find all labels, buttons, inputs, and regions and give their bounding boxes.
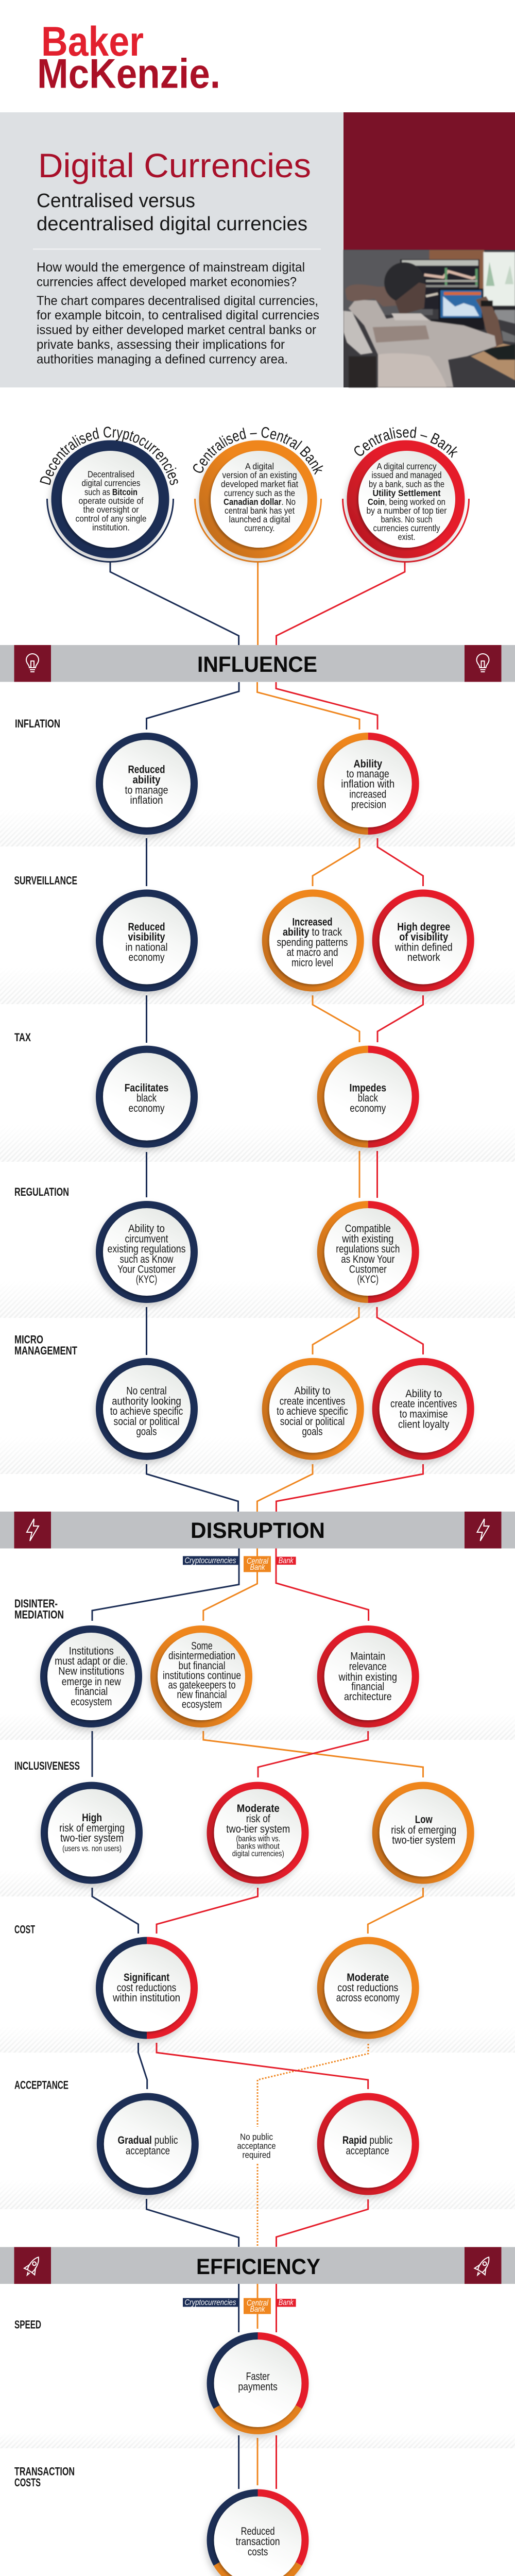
legend: currency types (efficiency): [183, 2298, 296, 2314]
panel: dark red block: [344, 112, 515, 250]
circle: institutions must adapt or die: New institutions: [58, 1665, 124, 1677]
circle: no central authority: authority looking: [112, 1395, 181, 1407]
row label: transaction costs: COSTS: [14, 2476, 41, 2489]
circle: ability to create incentives for loyalty: client loyalty: [398, 1419, 450, 1430]
subtitle: decentralised digital currencies: [37, 213, 307, 235]
subtitle: [37, 190, 307, 235]
icon: rocket left: [22, 2254, 44, 2278]
circle: low risk of two-tier system: risk of emerging: [391, 1824, 456, 1836]
circle: reduced ability to manage inflation: inflation: [130, 794, 163, 806]
top circle: centralised bank: A digital currency: [377, 461, 437, 471]
top circle: centralised central bank: version of an existing: [222, 470, 297, 480]
circle: facilitates black economy: black: [136, 1092, 157, 1104]
logo: Baker McKenzie: Baker: [41, 19, 144, 65]
circle: some disintermediation: as gatekeepers to: [168, 1679, 236, 1691]
row label: micro management: [14, 1333, 77, 1357]
intro text: The chart compares decentralised digital currencies,: [37, 294, 318, 308]
row label: inclusiveness: INCLUSIVENESS: [14, 1759, 80, 1772]
circle: moderate risk of two-tier system: Moderate: [237, 1803, 280, 1815]
top circle: centralised bank: by a number of top tier: [367, 505, 447, 516]
circle: faster payments: [207, 2332, 308, 2434]
legend: currency types (efficiency): Bank: [279, 2298, 294, 2307]
circle: significant cost reductions: [96, 1937, 198, 2039]
top circle: decentralised cryptocurrencies: Decentralised: [88, 469, 134, 479]
circle: ability to create incentives for loyalty: create incentives: [390, 1398, 457, 1410]
circle: ability to circumvent regulations: circumvent: [125, 1233, 168, 1245]
circle: impedes black economy: black: [358, 1092, 378, 1104]
circle: some disintermediation: but financial: [178, 1660, 226, 1672]
circle: faster payments: payments: [238, 2381, 278, 2393]
circle: institutions must adapt or die: must adapt or die.: [55, 1655, 128, 1667]
circle: significant cost reductions: cost reductions: [117, 1982, 176, 1994]
legend: currency types (disruption): Bank: [250, 1563, 265, 1572]
circle: moderate cost reductions: Moderate: [347, 1972, 389, 1984]
circle: compatible with existing regulations: as Know Your: [341, 1253, 394, 1265]
circle: reduced visibility: visibility: [128, 931, 165, 943]
circle: high risk of two-tier system: (users vs. non users): [62, 1844, 122, 1853]
circle: ability to circumvent regulations: existing regulations: [107, 1243, 185, 1255]
intro text: [37, 260, 319, 367]
arrows: connector lines, navy: [92, 562, 239, 2576]
circle: facilitates black economy: economy: [129, 1103, 165, 1114]
circle: significant cost reductions: Significant: [124, 1972, 169, 1984]
text: no public acceptance required: required: [242, 2149, 271, 2160]
circle: ability to create incentives for loyalty: to maximise: [400, 1409, 448, 1420]
circle: ability to create incentives for goals: goals: [302, 1426, 322, 1438]
circle: facilitates black economy: [96, 1046, 198, 1148]
row label: micro management: MICRO: [14, 1333, 43, 1346]
circle: moderate cost reductions: [317, 1937, 419, 2039]
top circle: decentralised cryptocurrencies: control of any single: [75, 513, 146, 523]
heading band: influence: INFLUENCE: [197, 652, 317, 677]
circle: low risk of two-tier system: two-tier system: [392, 1834, 455, 1846]
circle: high risk of two-tier system: risk of emerging: [59, 1822, 125, 1834]
top circle: centralised bank: exist.: [398, 532, 415, 542]
circle: maintain relevance: within existing: [338, 1671, 397, 1683]
circle: reduced ability to manage inflation: Reduced: [128, 764, 165, 776]
top circle: centralised central bank: central bank has yet: [225, 505, 295, 516]
row label: transaction costs: [14, 2465, 75, 2489]
arrows: connector lines, red: [156, 562, 423, 2576]
circle: no central authority: to achieve specific: [110, 1405, 183, 1417]
row label: micro management: MANAGEMENT: [14, 1344, 77, 1357]
circle: reduced transaction costs: transaction: [236, 2536, 280, 2548]
circle: high degree of visibility: within defined: [394, 942, 453, 954]
circle: reduced transaction costs: [207, 2489, 308, 2576]
row label: inflation: INFLATION: [15, 717, 60, 730]
circle: increased ability to track: Increased: [293, 916, 333, 928]
row label: transaction costs: TRANSACTION: [14, 2465, 75, 2478]
circle: maintain relevance: relevance: [349, 1660, 387, 1672]
panel: intro: [0, 112, 344, 387]
circle: reduced transaction costs: costs: [248, 2546, 268, 2558]
circle: some disintermediation: new financial: [177, 1689, 227, 1701]
icon: light bulb left: [26, 654, 39, 672]
circle: ability to manage inflation: increased: [349, 788, 386, 801]
circle: ability to manage inflation: precision: [351, 799, 386, 810]
legend: currency types (efficiency): Bank: [250, 2305, 265, 2314]
row label: disintermediation: DISINTER-: [14, 1597, 58, 1610]
circle: institutions must adapt or die: financial: [75, 1686, 108, 1698]
circle: high risk of two-tier system: High: [82, 1812, 102, 1824]
circle: no central authority: [96, 1358, 198, 1460]
intro text: issued by either developed market central banks or: [37, 323, 316, 337]
circle: impedes black economy: economy: [350, 1103, 386, 1114]
circle: high risk of two-tier system: two-tier system: [60, 1833, 124, 1844]
intro text: private banks, assessing their implications for: [37, 337, 285, 352]
heading band: efficiency: EFFICIENCY: [196, 2255, 320, 2279]
circle: ability to manage inflation: [317, 733, 419, 835]
circle: reduced visibility: Reduced: [128, 921, 165, 933]
row label: regulation: REGULATION: [14, 1185, 69, 1198]
circle: some disintermediation: ecosystem: [182, 1699, 222, 1710]
top circle: decentralised cryptocurrencies: the oversight or: [83, 504, 139, 515]
circle: some disintermediation: Some: [191, 1640, 213, 1652]
circle: maintain relevance: architecture: [344, 1691, 392, 1703]
circle: maintain relevance: financial: [351, 1681, 384, 1693]
title: Digital Currencies: [38, 146, 311, 184]
top circle: centralised bank: currencies currently: [373, 523, 440, 533]
circle: compatible with existing regulations: Customer: [349, 1263, 387, 1276]
circle: ability to circumvent regulations: such as Know: [119, 1253, 174, 1265]
circle: increased ability to track: spending patterns: [277, 937, 348, 948]
circle: moderate risk of two-tier system: [207, 1782, 309, 1884]
circle: maintain relevance: [317, 1625, 419, 1727]
circle: increased ability to track: ability to track: [283, 926, 342, 938]
circle: high risk of two-tier system: [41, 1782, 143, 1884]
icon: lightning bolt left: [27, 1519, 39, 1541]
circle: reduced ability to manage inflation: to manage: [125, 784, 168, 796]
row label: cost: COST: [14, 1923, 35, 1936]
photo: trader at monitors: [344, 250, 515, 387]
circle: high degree of visibility: network: [407, 952, 440, 963]
heading band: influence: [0, 645, 515, 682]
top circle: centralised bank: Centralised – Bank: [354, 427, 458, 458]
text: no public acceptance required: No public: [240, 2132, 273, 2142]
legend: currency types (efficiency): Cryptocurrencies: [184, 2298, 236, 2307]
circle: ability to circumvent regulations: [96, 1201, 198, 1303]
circle: ability to manage inflation: inflation with: [341, 778, 394, 790]
row label: speed: SPEED: [14, 2318, 41, 2331]
circle: low risk of two-tier system: [372, 1782, 474, 1884]
circle: gradual public acceptance: [97, 2093, 199, 2195]
circle: compatible with existing regulations: (KYC): [357, 1274, 379, 1285]
circle: ability to circumvent regulations: Ability to: [128, 1223, 165, 1234]
circle: moderate risk of two-tier system: risk of: [246, 1813, 270, 1825]
circle: compatible with existing regulations: regulations such: [336, 1243, 400, 1255]
circle: reduced visibility: economy: [129, 952, 165, 963]
circle: ability to circumvent regulations: (KYC): [136, 1274, 157, 1285]
top circle: centralised central bank: currency.: [244, 523, 275, 533]
circle: high degree of visibility: [372, 889, 474, 991]
circle: facilitates black economy: Facilitates: [125, 1082, 168, 1094]
circle: reduced transaction costs: Reduced: [241, 2526, 275, 2537]
circle: ability to create incentives for goals: [262, 1358, 364, 1460]
circle: impedes black economy: Impedes: [350, 1082, 386, 1094]
circle: ability to manage inflation: Ability: [354, 758, 382, 770]
top circle: decentralised cryptocurrencies: institution.: [92, 522, 130, 533]
row label: disintermediation: MEDIATION: [14, 1608, 64, 1621]
circle: moderate risk of two-tier system: (banks with vs.: [236, 1835, 280, 1843]
row label: tax: TAX: [14, 1031, 31, 1044]
logo: Baker McKenzie: [37, 19, 220, 97]
circle: compatible with existing regulations: with existing: [341, 1233, 393, 1245]
circle: ability to create incentives for goals: create incentives: [280, 1395, 345, 1407]
legend: currency types (disruption): Bank: [279, 1556, 294, 1565]
circle: ability to create incentives for goals: Ability to: [295, 1385, 331, 1397]
circle: institutions must adapt or die: emerge in new: [62, 1676, 121, 1688]
circle: institutions must adapt or die: Institutions: [69, 1646, 114, 1657]
circle: ability to create incentives for goals: to achieve specific: [277, 1405, 348, 1417]
circle: moderate risk of two-tier system: digital currencies): [232, 1850, 284, 1858]
circle: increased ability to track: [262, 889, 364, 991]
circle: ability to circumvent regulations: Your Customer: [117, 1263, 176, 1276]
circle: institutions must adapt or die: ecosystem: [71, 1696, 112, 1708]
top circle: centralised bank: [342, 427, 470, 565]
circle: reduced visibility: [96, 889, 198, 991]
circle: moderate cost reductions: cost reductions: [337, 1982, 398, 1994]
row label: surveillance: SURVEILLANCE: [14, 874, 77, 887]
row label: disintermediation: [14, 1597, 64, 1621]
circle: significant cost reductions: within institution: [112, 1992, 180, 2004]
top circle: centralised central bank: [193, 427, 323, 565]
legend: currency types (disruption): [183, 1556, 296, 1572]
top circle: centralised central bank: currency such as the: [224, 488, 295, 498]
circle: increased ability to track: at macro and: [286, 947, 338, 959]
circle: ability to create incentives for goals: social or political: [280, 1416, 345, 1428]
top circle: decentralised cryptocurrencies: digital currencies: [81, 478, 141, 488]
circle: rapid public acceptance: acceptance: [346, 2145, 389, 2157]
circle: gradual public acceptance: acceptance: [126, 2145, 170, 2157]
circle: some disintermediation: institutions continue: [163, 1670, 241, 1682]
circle: institutions must adapt or die: [40, 1625, 142, 1727]
top circle: centralised bank: by a bank, such as the: [369, 479, 444, 489]
icon: light bulb right: [477, 654, 489, 672]
circle: compatible with existing regulations: Compatible: [345, 1223, 391, 1234]
top circle: centralised central bank: developed market fiat: [221, 479, 298, 489]
heading band: disruption: DISRUPTION: [191, 1518, 325, 1543]
top circle: decentralised cryptocurrencies: operate outside of: [78, 496, 144, 506]
icon: rocket right: [472, 2254, 494, 2278]
circle: impedes black economy: [317, 1046, 419, 1148]
circle: gradual public acceptance: Gradual public: [117, 2134, 178, 2146]
text: no public acceptance required: [237, 2132, 276, 2160]
heading band: efficiency: [0, 2247, 515, 2284]
circle: no central authority: No central: [126, 1385, 167, 1397]
circle: rapid public acceptance: Rapid public: [342, 2134, 392, 2146]
top circle: centralised bank: Coin, being worked on: [368, 497, 445, 507]
intro text: How would the emergence of mainstream digital: [37, 260, 305, 275]
intro text: currencies affect developed market economies?: [37, 275, 297, 290]
circle: high degree of visibility: of visibility: [399, 931, 448, 943]
circle: some disintermediation: disintermediation: [168, 1650, 235, 1662]
circle: ability to create incentives for loyalty: [372, 1358, 474, 1460]
circle: reduced visibility: in national: [126, 942, 168, 954]
arrows: connector lines, orange: [203, 562, 423, 2576]
hatched row backgrounds: [0, 809, 515, 2576]
icon: lightning bolt right: [477, 1519, 489, 1541]
top circle: decentralised cryptocurrencies: such as Bitcoin: [84, 487, 138, 497]
top circle: centralised central bank: A digital: [245, 461, 274, 471]
circle: increased ability to track: micro level: [291, 957, 333, 969]
circle: low risk of two-tier system: Low: [415, 1814, 433, 1826]
circle: faster payments: Faster: [246, 2371, 270, 2383]
circle: moderate risk of two-tier system: two-tier system: [226, 1823, 290, 1835]
top circle: centralised central bank: launched a digital: [229, 514, 290, 524]
top circle: centralised bank: Utility Settlement: [373, 488, 441, 498]
top circle: decentralised cryptocurrencies: Decentralised Cryptocurrencies: [40, 427, 178, 485]
intro text: authorities managing a defined currency area.: [37, 352, 288, 367]
circle: compatible with existing regulations: [317, 1201, 419, 1303]
top circle: centralised bank: issued and managed: [372, 470, 442, 480]
circle: reduced ability to manage inflation: ability: [133, 774, 161, 786]
circle: some disintermediation: [150, 1625, 252, 1727]
top circle: centralised central bank: Centralised – Central Bank: [193, 427, 323, 475]
circle: ability to create incentives for loyalty: Ability to: [405, 1388, 442, 1400]
heading band: disruption: [0, 1512, 515, 1549]
circle: moderate risk of two-tier system: banks without: [237, 1842, 280, 1851]
logo: Baker McKenzie: McKenzie.: [37, 50, 220, 97]
circle: no central authority: social or political: [113, 1416, 179, 1428]
legend: currency types (efficiency): Central: [247, 2299, 268, 2308]
legend: currency types (disruption): Central: [247, 1557, 268, 1566]
circle: moderate cost reductions: across economy: [336, 1992, 400, 2004]
circle: maintain relevance: Maintain: [350, 1651, 385, 1662]
circle: no central authority: goals: [136, 1426, 157, 1438]
text: no public acceptance required: acceptance: [237, 2141, 276, 2151]
legend: currency types (disruption): Cryptocurrencies: [184, 1556, 236, 1565]
top circle: centralised bank: banks. No such: [381, 514, 433, 524]
intro text: for example bitcoin, to centralised digital currencies: [37, 308, 319, 323]
circle: reduced ability to manage inflation: [96, 733, 198, 835]
circle: rapid public acceptance: [317, 2093, 419, 2195]
row label: acceptance: ACCEPTANCE: [14, 2079, 68, 2092]
top circle: centralised central bank: Canadian dollar. No: [224, 497, 296, 507]
subtitle: Centralised versus: [37, 190, 195, 212]
circle: ability to manage inflation: to manage: [347, 768, 389, 780]
top circle: decentralised cryptocurrencies: [40, 427, 178, 565]
circle: high degree of visibility: High degree: [397, 921, 450, 933]
